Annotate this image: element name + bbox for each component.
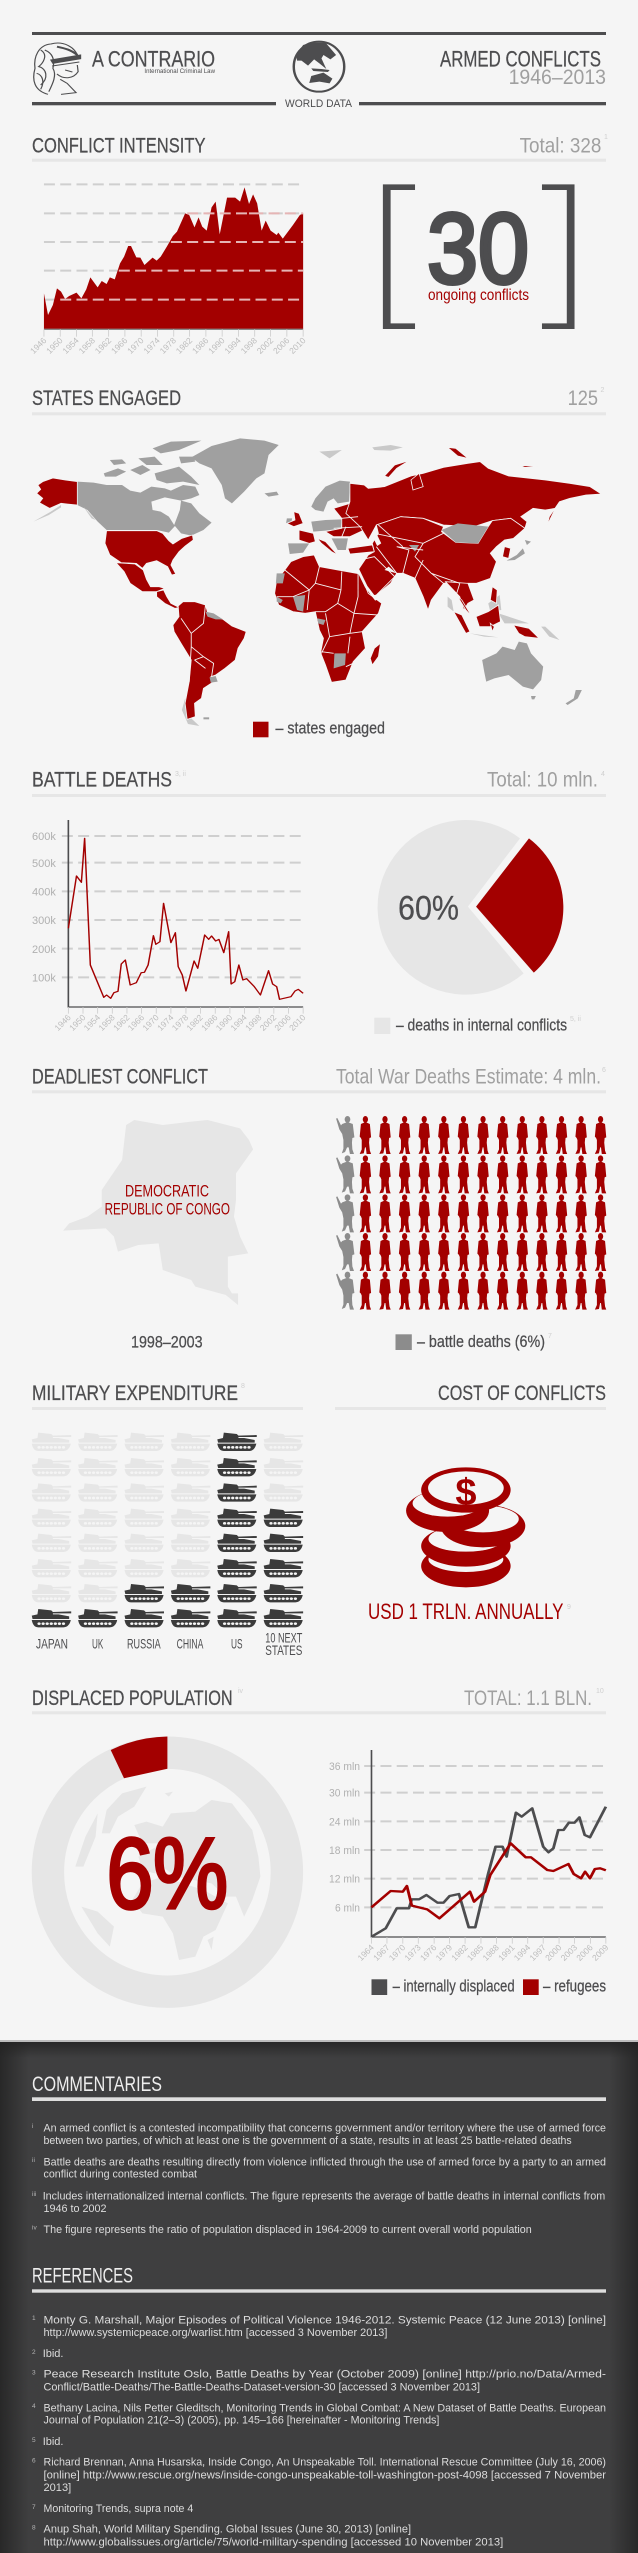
reference list: Monitoring Trends, supra note 4: [44, 2503, 193, 2515]
chart: conflict intensity area: 2010: [287, 335, 308, 356]
commentary notes: Includes internationalized internal conflicts. The figure represents the average of battle deaths in internal conflicts from: [43, 2190, 605, 2202]
chart: conflict intensity area: 1966: [109, 335, 130, 356]
logo subtitle: International Criminal Law: [144, 68, 215, 75]
chart: battle deaths line: 2002: [258, 1012, 278, 1033]
commentary notes: [32, 2123, 606, 2236]
chart: displaced lines: 2000: [543, 1942, 564, 1963]
reference list: 5: [32, 2437, 36, 2444]
logo title: A CONTRARIO: [92, 47, 215, 72]
chart: battle deaths line: 2006: [272, 1012, 293, 1033]
tank column labels: STATES: [265, 1642, 302, 1658]
chart: conflict intensity area: 1970: [125, 335, 146, 356]
chart: battle deaths line: 1978: [170, 1012, 190, 1033]
chart: displaced lines: 1985: [465, 1942, 485, 1963]
chart: conflict intensity area: 2006: [271, 335, 292, 356]
reference list: 1: [32, 2315, 36, 2322]
chart: conflict intensity area: 1954: [60, 335, 81, 356]
chart: battle deaths line: 1958: [96, 1012, 117, 1033]
icon: brackets: [383, 184, 575, 329]
chart: battle deaths line: [32, 820, 308, 1033]
chart: displaced lines: 30 mln: [329, 1788, 360, 1800]
ongoing conflicts label: ongoing conflicts: [428, 287, 529, 304]
legend: battle deaths: – battle deaths (6%): [417, 1332, 545, 1351]
section heading: states engaged: 2: [600, 387, 604, 394]
reference list: Bethany Lacina, Nils Petter Gleditsch, Monitoring Trends in Global Combat: A New Dataset of Battle Deaths. European: [44, 2402, 606, 2414]
reference list: Monty G. Marshall, Major Episodes of Political Violence 1946-2012. Systemic Peace (12 June 2013) [online]: [44, 2314, 606, 2326]
section heading: battle deaths: Total: 10 mln.: [487, 768, 598, 792]
tank column labels: [36, 1629, 303, 1658]
chart: battle deaths line: 100k: [32, 972, 56, 984]
chart: battle deaths line: 1982: [184, 1012, 205, 1033]
commentary notes: 1946 to 2002: [44, 2203, 106, 2215]
reference list: Peace Research Institute Oslo, Battle Deaths by Year (October 2009) [online] http://prio.no/Data/Armed-: [44, 2369, 606, 2381]
chart: displaced lines: 1979: [434, 1942, 454, 1963]
tank column labels: 10 NEXT: [265, 1629, 303, 1645]
chart: displaced lines: 1973: [402, 1942, 423, 1963]
commentary notes: i: [32, 2123, 33, 2130]
chart: displaced lines: 1964: [355, 1942, 376, 1963]
chart: battle deaths line: 1950: [67, 1012, 88, 1033]
section heading: deadliest conflict: [32, 1064, 606, 1093]
commentary notes: conflict during contested combat: [44, 2169, 198, 2181]
map: democratic republic of congo: [63, 1120, 253, 1352]
legend: states engaged: – states engaged: [276, 718, 385, 737]
commentary notes: Battle deaths are deaths resulting directly from violence inflicted through the use of armed force by a party to an armed: [44, 2157, 606, 2169]
section heading: deadliest conflict: DEADLIEST CONFLICT: [32, 1064, 208, 1088]
chart: battle deaths line: 1970: [140, 1012, 161, 1033]
section heading: conflict intensity: [32, 134, 608, 162]
section heading: displaced population: 10: [596, 1688, 604, 1695]
commentary notes: iii: [32, 2191, 36, 2198]
main title dates: 1946–2013: [509, 65, 606, 89]
map: democratic republic of congo: REPUBLIC OF CONGO: [105, 1200, 230, 1218]
chart: displaced lines: 36 mln: [329, 1761, 360, 1773]
six percent label: 6%: [107, 1818, 228, 1930]
reference list: 7: [32, 2504, 36, 2511]
reference list: Richard Brennan, Anna Husarska, Inside Congo, An Unspeakable Toll. International Rescue Committee (July 16, 2006): [44, 2457, 606, 2469]
chart: battle deaths line: 400k: [32, 886, 56, 898]
chart: displaced lines: 1976: [418, 1942, 439, 1963]
chart: battle deaths line: 1966: [126, 1012, 146, 1033]
reference list: Journal of Population 21(2–3) (2005), pp. 145–166 [hereinafter - Monitoring Trends]: [44, 2415, 439, 2427]
chart: conflict intensity area: 1974: [141, 335, 162, 356]
reference list: http://www.globalissues.org/article/75/world-military-spending [accessed 10 November 2013]: [44, 2536, 503, 2548]
chart: conflict intensity area: 1994: [222, 335, 243, 356]
map: democratic republic of congo: DEMOCRATIC: [125, 1183, 209, 1201]
chart: displaced lines: 2006: [574, 1942, 595, 1963]
chart: conflict intensity area: 1958: [77, 335, 97, 356]
tank column labels: US: [231, 1635, 242, 1651]
chart: conflict intensity area: 1990: [206, 335, 227, 356]
section heading: battle deaths: [32, 768, 606, 797]
chart: battle deaths line: 200k: [32, 944, 56, 956]
legend: internally displaced and refugees: [372, 1977, 606, 1996]
reference list: 6: [32, 2458, 36, 2464]
chart: conflict intensity area: 1978: [158, 335, 178, 356]
donut red segment: [111, 1736, 167, 1778]
chart: displaced lines: 18 mln: [329, 1845, 360, 1857]
legend: battle deaths: 7: [548, 1333, 552, 1340]
heading: references: REFERENCES: [32, 2263, 133, 2287]
heading: commentaries: [32, 2072, 606, 2101]
chart: displaced lines: 1967: [371, 1942, 392, 1963]
section heading: states engaged: 125: [568, 386, 598, 410]
panel: footer: [0, 2040, 638, 2553]
callout: ongoing conflicts: [383, 184, 575, 329]
chart: battle deaths line: 1974: [155, 1012, 176, 1033]
chart: battle deaths line: 300k: [32, 915, 56, 927]
chart: displaced lines: 1982: [449, 1942, 470, 1963]
chart: battle deaths line: 1954: [82, 1012, 102, 1033]
cost of conflicts value: USD 1 TRLN. ANNUALLY: [368, 1599, 564, 1624]
section heading: states engaged: STATES ENGAGED: [32, 386, 181, 410]
chart: battle deaths line: 1962: [111, 1012, 132, 1033]
map: democratic republic of congo: 1998–2003: [131, 1333, 203, 1352]
section heading: battle deaths: BATTLE DEATHS: [32, 768, 172, 792]
chart: displaced lines: 2009: [590, 1942, 611, 1963]
reference list: [32, 2314, 606, 2548]
chart: conflict intensity area: 2002: [255, 335, 275, 356]
chart: conflict intensity area: 1998: [239, 335, 259, 356]
chart: conflict intensity area: 1946: [28, 335, 49, 356]
reference list: Conflict/Battle-Deaths/The-Battle-Deaths-Dataset-version-30 [accessed 3 November 2013]: [44, 2381, 480, 2393]
tank column labels: CHINA: [177, 1635, 204, 1651]
reference list: 8: [32, 2524, 36, 2532]
chart: battle deaths line: 1994: [228, 1012, 249, 1033]
chart: pie internal conflicts: [378, 820, 563, 995]
icon: coin stack: $: [455, 1472, 477, 1514]
chart: conflict intensity area: 1950: [44, 335, 65, 356]
commentary notes: iv: [32, 2224, 37, 2232]
section heading: battle deaths: 3, ii: [175, 771, 186, 778]
chart: displaced lines: 1994: [512, 1942, 532, 1963]
chart: pie internal conflicts: 60%: [398, 889, 459, 927]
chart: tanks pictogram: [32, 1433, 303, 1627]
reference list: 4: [32, 2403, 36, 2410]
reference list: Ibid.: [43, 2436, 64, 2448]
commentary notes: The figure represents the ratio of population displaced in 1964-2009 to current overall world population: [44, 2224, 532, 2236]
commentary notes: An armed conflict is a contested incompatibility that concerns government and/or territory where the use of armed force: [44, 2123, 606, 2135]
chart: battle deaths line: 600k: [32, 831, 56, 843]
section heading: military expenditure: MILITARY EXPENDITURE: [32, 1381, 238, 1405]
chart: conflict intensity area: 1962: [93, 335, 113, 356]
section heading: conflict intensity: 1: [604, 134, 608, 141]
icon: globe: [294, 42, 344, 92]
chart: conflict intensity area: 1986: [190, 335, 211, 356]
chart: conflict intensity area: [28, 184, 308, 356]
chart: displaced lines: 1991: [496, 1942, 517, 1963]
section heading: battle deaths: 4: [601, 771, 605, 778]
chart: displaced lines: 1997: [527, 1942, 548, 1963]
chart: displaced lines: 2003: [559, 1942, 579, 1963]
commentary notes: between two parties, of which at least one is the government of a state, results in at least 25 battle-related deaths: [44, 2135, 572, 2147]
tank column labels: JAPAN: [36, 1635, 68, 1651]
legend: deaths in internal conflicts: 5, ii: [570, 1016, 581, 1023]
chart: displaced lines: 1970: [387, 1942, 407, 1963]
commentary notes: ii: [32, 2157, 35, 2164]
chart: displaced lines: 1988: [480, 1942, 501, 1963]
section heading: displaced population: iv: [238, 1688, 244, 1695]
section heading: displaced population: TOTAL: 1.1 BLN.: [464, 1686, 592, 1710]
chart: battle deaths line: 2010: [287, 1012, 308, 1033]
chart: battle deaths line: 1990: [214, 1012, 234, 1033]
section heading: states engaged: [32, 386, 606, 415]
chart: world map: [33, 438, 601, 726]
reference list: 2: [32, 2349, 36, 2356]
chart: battle deaths line: 1946: [52, 1012, 73, 1033]
chart: displaced lines: 24 mln: [329, 1816, 360, 1828]
tank column labels: UK: [92, 1635, 104, 1651]
reference list: Anup Shah, World Military Spending. Global Issues (June 30, 2013) [online]: [44, 2524, 411, 2536]
reference list: http://www.systemicpeace.org/warlist.htm [accessed 3 November 2013]: [44, 2327, 387, 2339]
reference list: 2013]: [44, 2482, 71, 2494]
chart: displaced lines: 12 mln: [329, 1874, 360, 1886]
legend: deaths in internal conflicts: – deaths in internal conflicts: [396, 1016, 567, 1035]
globe silhouette: [75, 1787, 260, 1960]
chart: conflict intensity area: 1982: [174, 335, 194, 356]
chart: displaced lines: [329, 1750, 611, 1963]
cost of conflicts value: 9: [567, 1604, 571, 1611]
chart: battle deaths line: 1998: [243, 1012, 264, 1033]
chart: soldiers pictogram: [336, 1116, 606, 1310]
reference list: 3: [32, 2370, 36, 2376]
chart: displaced lines: 6 mln: [335, 1902, 360, 1914]
section heading: conflict intensity: CONFLICT INTENSITY: [32, 134, 206, 158]
tank column labels: RUSSIA: [127, 1635, 161, 1651]
section heading: conflict intensity: Total: 328: [520, 134, 601, 158]
icon: blindfolded justice logo: [34, 43, 81, 94]
icon: coin stack: [406, 1467, 525, 1587]
heading: references: [32, 2263, 606, 2293]
legend: internally displaced and refugees: – internally displaced: [393, 1977, 515, 1996]
number 30: 30: [427, 193, 529, 305]
section heading: deadliest conflict: 6: [602, 1067, 606, 1074]
chart: donut six percent: [48, 1736, 287, 1992]
section heading: displaced population: DISPLACED POPULATION: [32, 1686, 233, 1710]
header: [32, 32, 606, 110]
reference list: Ibid.: [43, 2348, 64, 2360]
section heading: cost of conflicts: [335, 1381, 606, 1410]
section heading: displaced population: [32, 1686, 606, 1714]
section heading: military expenditure: 8: [241, 1383, 245, 1390]
heading: commentaries: COMMENTARIES: [32, 2072, 162, 2096]
reference list: [online] http://www.rescue.org/news/inside-congo-unspeakable-toll-washington-post-4098 [accessed 7 November: [44, 2469, 606, 2481]
world data label: WORLD DATA: [285, 98, 353, 110]
chart: battle deaths line: 1986: [199, 1012, 220, 1033]
chart: battle deaths line: 500k: [32, 858, 56, 870]
legend: internally displaced and refugees: – refugees: [543, 1977, 606, 1996]
